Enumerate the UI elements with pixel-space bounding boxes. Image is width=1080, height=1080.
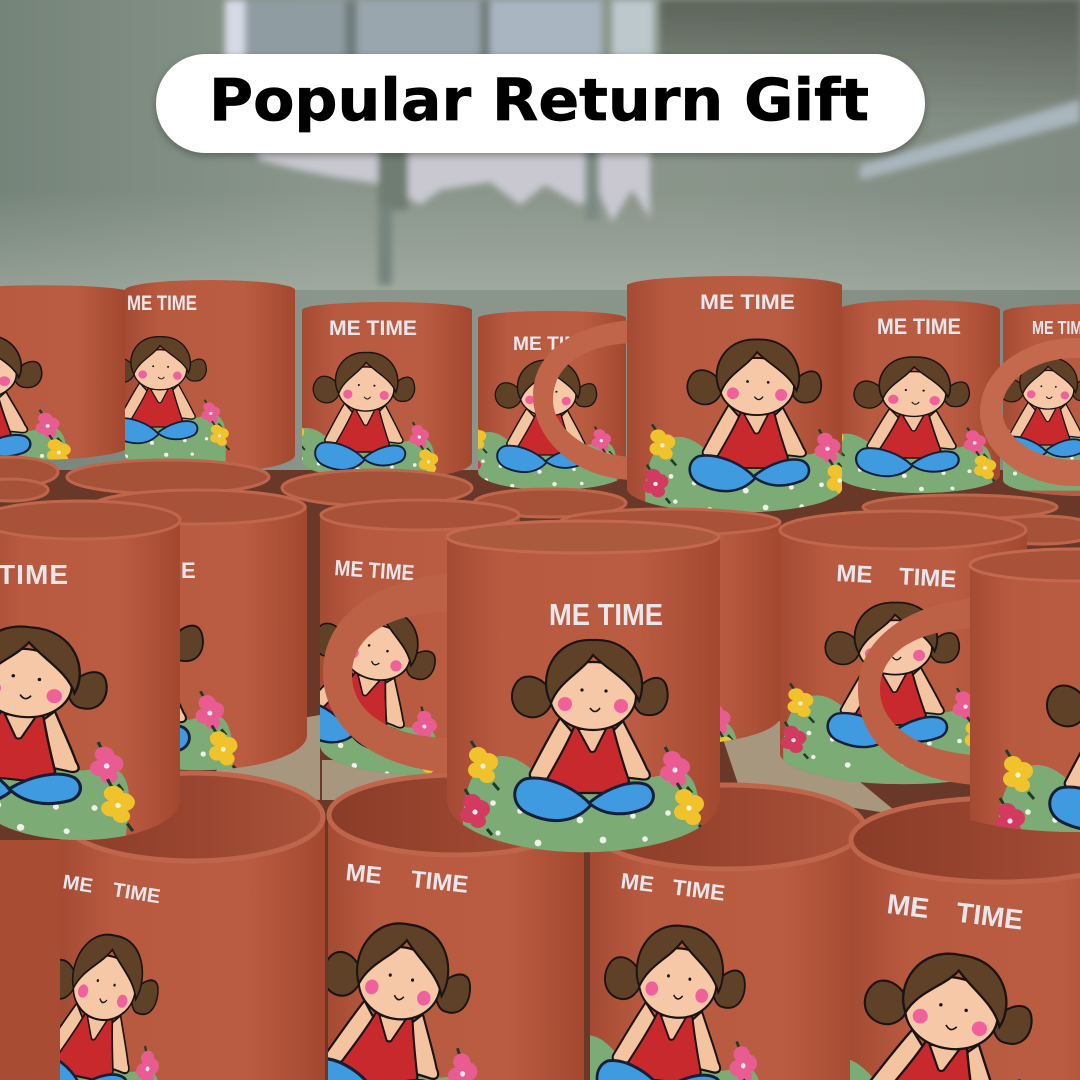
mug: back row third [302,302,472,474]
mug: bottom row centre right: ME TIME [619,868,726,906]
mug: centre foreground hero mug [323,520,720,873]
mug: back row fourth: ME TIME [513,334,593,355]
mug: back row far right [1003,304,1080,496]
mug: middle row right [780,511,1027,789]
mug: bottom row right: ME TIME [885,888,1025,936]
title text: Popular Return Gift [209,66,869,134]
back row of mugs [0,276,1080,535]
mug: middle row centre right [560,508,782,742]
mug: large left foreground [0,500,180,872]
mug: centre foreground hero mug: ME TIME [549,597,663,632]
mug: middle row behind left: E [181,558,196,583]
rims of lower mugs behind the middle row [0,457,1080,544]
mug: bottom row left [60,770,326,1080]
mug: back row far left [0,285,125,460]
mug: back row second: ME TIME [127,292,197,315]
mug: back row sixth: ME TIME [877,314,961,339]
mug: back row fourth [478,311,626,488]
mug: middle row right: ME TIME [836,560,957,593]
mug: middle row centre left: ME TIME [334,555,415,586]
shelf surfaces [210,715,900,815]
mug: raised front mug with handle [533,276,842,512]
mug: large left foreground: TIME [0,559,68,590]
mug: bottom row right [848,796,1080,1080]
handle: right edge mug [980,338,1080,486]
title pill [156,54,925,153]
mug: raised front mug with handle: ME TIME [700,291,795,314]
mug: back row sixth [842,300,1000,493]
mug: middle row centre left [320,498,520,775]
mug: middle row behind left [97,488,307,770]
mug: right foreground with handle [858,548,1080,832]
mug: bottom row centre left [326,773,584,1080]
mug: bottom row far left [0,840,60,1080]
mug: bottom row centre left: ME TIME [344,859,470,899]
mug: back row third: ME TIME [329,317,417,340]
mug: bottom row left: ME TIME [61,871,162,908]
mug: back row second [125,280,295,468]
mug: bottom row centre right [590,782,864,1080]
